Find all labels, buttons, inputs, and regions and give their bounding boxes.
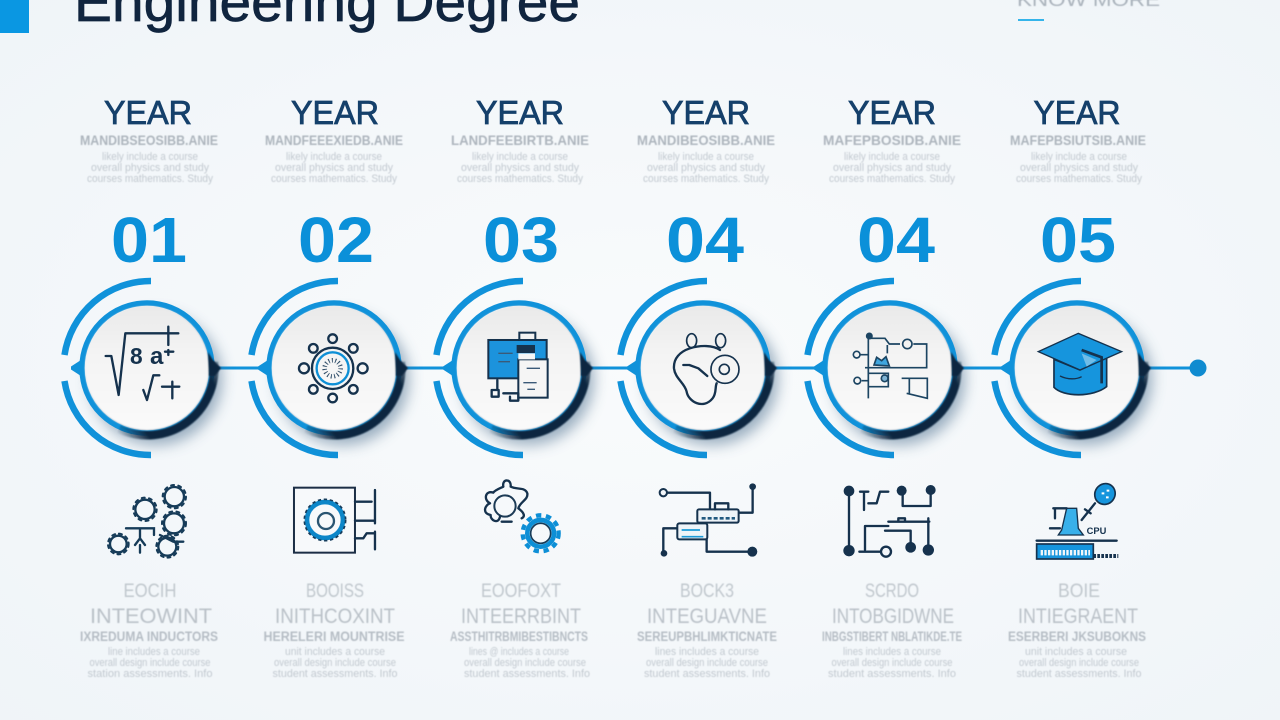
column 5 year text: courses mathematics. Study <box>829 173 955 185</box>
column 3 year text: overall physics and study <box>461 162 579 174</box>
column 2 lower text <box>264 581 404 680</box>
column 4 lower text: INTEGUAVNE <box>647 605 767 628</box>
column 4 year text <box>637 94 775 185</box>
column 1 lower text: EOCIH <box>124 581 176 602</box>
column 6 year text: likely include a course <box>1031 151 1127 163</box>
column 1 year text: MANDIBSEOSIBB.ANIE <box>80 132 218 148</box>
column 1 lower text: line includes a course <box>108 646 200 658</box>
node 1 with math icon: 8 <box>130 343 143 369</box>
column 5 year text: overall physics and study <box>833 162 951 174</box>
column 6 year text <box>1010 94 1146 185</box>
column 2 lower text: INITHCOXINT <box>275 605 395 628</box>
column 6 year text: MAFEPBSIUTSIB.ANIE <box>1010 132 1146 148</box>
column 1 lower text: IXREDUMA INDUCTORS <box>80 629 218 644</box>
column 4 year text: MANDIBEOSIBB.ANIE <box>637 132 775 148</box>
node 3 with documents icon <box>436 281 594 455</box>
lower icon: robot arm and CPU <box>1037 480 1119 559</box>
lower icon: gears cluster <box>108 485 186 558</box>
timeline end dot <box>1190 360 1206 376</box>
number 01: 01 <box>111 204 187 276</box>
column 3 lower text: overall design include course <box>464 657 586 669</box>
lower icon: robot arm and CPU: CPU <box>1087 526 1107 536</box>
column 6 lower text: ESERBERI JKSUBOKNS <box>1008 629 1146 644</box>
column 1 year text: YEAR <box>104 94 192 131</box>
column 1 lower text: overall design include course <box>90 657 210 669</box>
column 4 year text: YEAR <box>662 94 750 131</box>
node 1 with math icon <box>64 281 222 455</box>
column 3 lower text: INTEERRBINT <box>461 605 581 628</box>
column 1 year text: overall physics and study <box>91 162 209 174</box>
column 5 lower text <box>822 581 962 680</box>
number 02: 02 <box>298 204 374 276</box>
number 04 second: 04 <box>857 204 935 276</box>
column 3 year text <box>451 94 589 185</box>
column 1 lower text: station assessments. Info <box>88 668 212 680</box>
column 2 lower text: HERELERI MOUNTRISE <box>264 629 404 644</box>
node 2 with gear icon <box>252 281 409 455</box>
column 2 year text: courses mathematics. Study <box>271 173 397 185</box>
column 2 lower text: BOOISS <box>306 581 364 602</box>
lower icon: circuit with chips <box>660 483 757 557</box>
column 6 lower text <box>1008 581 1146 680</box>
column 6 lower text: INTIEGRAENT <box>1018 605 1138 628</box>
column 6 year text: YEAR <box>1034 94 1120 131</box>
column 6 lower text: student assessments. Info <box>1016 668 1142 680</box>
column 1 year text: courses mathematics. Study <box>87 173 213 185</box>
column 4 lower text: overall design include course <box>646 657 768 669</box>
node 1 with math icon: a <box>150 343 164 370</box>
column 1 year text <box>80 94 218 185</box>
column 5 lower text: INTOBGIDWNE <box>832 605 954 628</box>
column 4 lower text: SEREUPBHLIMKTICNATE <box>637 629 777 644</box>
column 3 lower text <box>450 581 590 680</box>
column 5 lower text: INBGSTIBERT NBLATIKDE.TE <box>822 629 962 644</box>
column 6 lower text: BOIE <box>1058 581 1100 602</box>
lower icon: linked gears <box>485 480 559 551</box>
column 4 year text: courses mathematics. Study <box>643 173 769 185</box>
column 2 lower text: student assessments. Info <box>272 668 398 680</box>
node 4 with heart icon <box>620 281 778 455</box>
column 6 lower text: overall design include course <box>1019 657 1139 669</box>
column 3 year text: likely include a course <box>472 151 568 163</box>
node 5 with circuit icon <box>808 281 965 455</box>
column 3 lower text: student assessments. Info <box>464 668 590 680</box>
lower icon: circuit traces <box>843 485 936 557</box>
column 3 year text: courses mathematics. Study <box>457 173 583 185</box>
column 2 year text: YEAR <box>291 94 379 131</box>
column 6 year text: overall physics and study <box>1020 162 1138 174</box>
column 2 year text: MANDFEEEXIEDB.ANIE <box>265 132 403 148</box>
node 6 with graduation cap icon <box>994 281 1152 455</box>
column 4 year text: likely include a course <box>658 151 754 163</box>
column 4 lower text: student assessments. Info <box>644 668 770 680</box>
number 03: 03 <box>483 204 559 276</box>
column 2 year text: likely include a course <box>286 151 382 163</box>
column 1 lower text <box>80 581 218 680</box>
column 5 lower text: student assessments. Info <box>828 668 956 680</box>
column 5 lower text: SCRDO <box>865 581 919 602</box>
column 6 year text: courses mathematics. Study <box>1016 173 1142 185</box>
column 2 year text: overall physics and study <box>275 162 393 174</box>
column 3 year text: YEAR <box>476 94 564 131</box>
column 4 lower text: lines includes a course <box>655 646 759 658</box>
number 04: 04 <box>666 204 744 276</box>
column 4 lower text <box>637 581 777 680</box>
column 5 year text <box>823 94 961 185</box>
column 4 year text: overall physics and study <box>647 162 765 174</box>
number 05: 05 <box>1040 204 1116 276</box>
column 2 lower text: unit includes a course <box>285 646 385 658</box>
column 4 lower text: BOCK3 <box>680 581 734 602</box>
column 1 lower text: INTEOWINT <box>90 605 212 628</box>
column 5 year text: likely include a course <box>844 151 940 163</box>
corner accent <box>0 0 29 33</box>
column 1 year text: likely include a course <box>102 151 198 163</box>
column 3 lower text: ASSTHITRBMIBESTIBNCTS <box>450 629 588 644</box>
column 3 lower text: lines @ includes a course <box>469 646 569 658</box>
lower icon: framed gear <box>294 488 375 553</box>
column 6 lower text: unit includes a course <box>1025 646 1127 658</box>
timeline connector line <box>212 366 1198 370</box>
column 3 year text: LANDFEEBIRTB.ANIE <box>451 132 589 148</box>
column 5 lower text: lines includes a course <box>843 646 941 658</box>
column 2 lower text: overall design include course <box>274 657 396 669</box>
column 3 lower text: EOOFOXT <box>481 581 561 602</box>
column 5 year text: YEAR <box>848 94 936 131</box>
column 2 year text <box>265 94 403 185</box>
column 5 lower text: overall design include course <box>832 657 952 669</box>
column 5 year text: MAFEPBOSIDB.ANIE <box>823 132 961 148</box>
